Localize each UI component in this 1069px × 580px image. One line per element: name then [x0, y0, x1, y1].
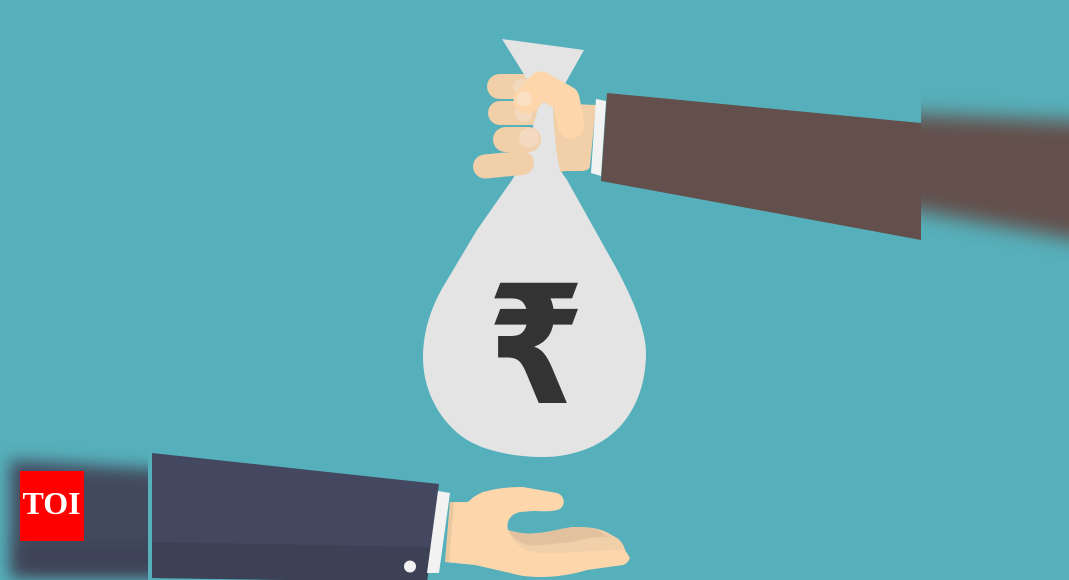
- rupee symbol: ₹: [487, 254, 585, 439]
- lower sleeve: [152, 453, 439, 580]
- upper sleeve: [601, 93, 921, 240]
- lower open hand: [445, 487, 630, 577]
- TOI logo: TOI: [22, 485, 81, 521]
- lower shirt cuff: [427, 491, 450, 573]
- sleeve button: [404, 560, 416, 572]
- blurred sleeve extension: left: [0, 450, 148, 580]
- upper hand: palm, fingers and thumb over bag: [485, 85, 596, 172]
- upper shirt cuff: [591, 99, 606, 176]
- upper hand: fingers behind bag: [487, 74, 544, 172]
- TOI logo: [20, 471, 84, 541]
- blurred sleeve extension: right: [921, 100, 1069, 253]
- money bag: [423, 39, 646, 457]
